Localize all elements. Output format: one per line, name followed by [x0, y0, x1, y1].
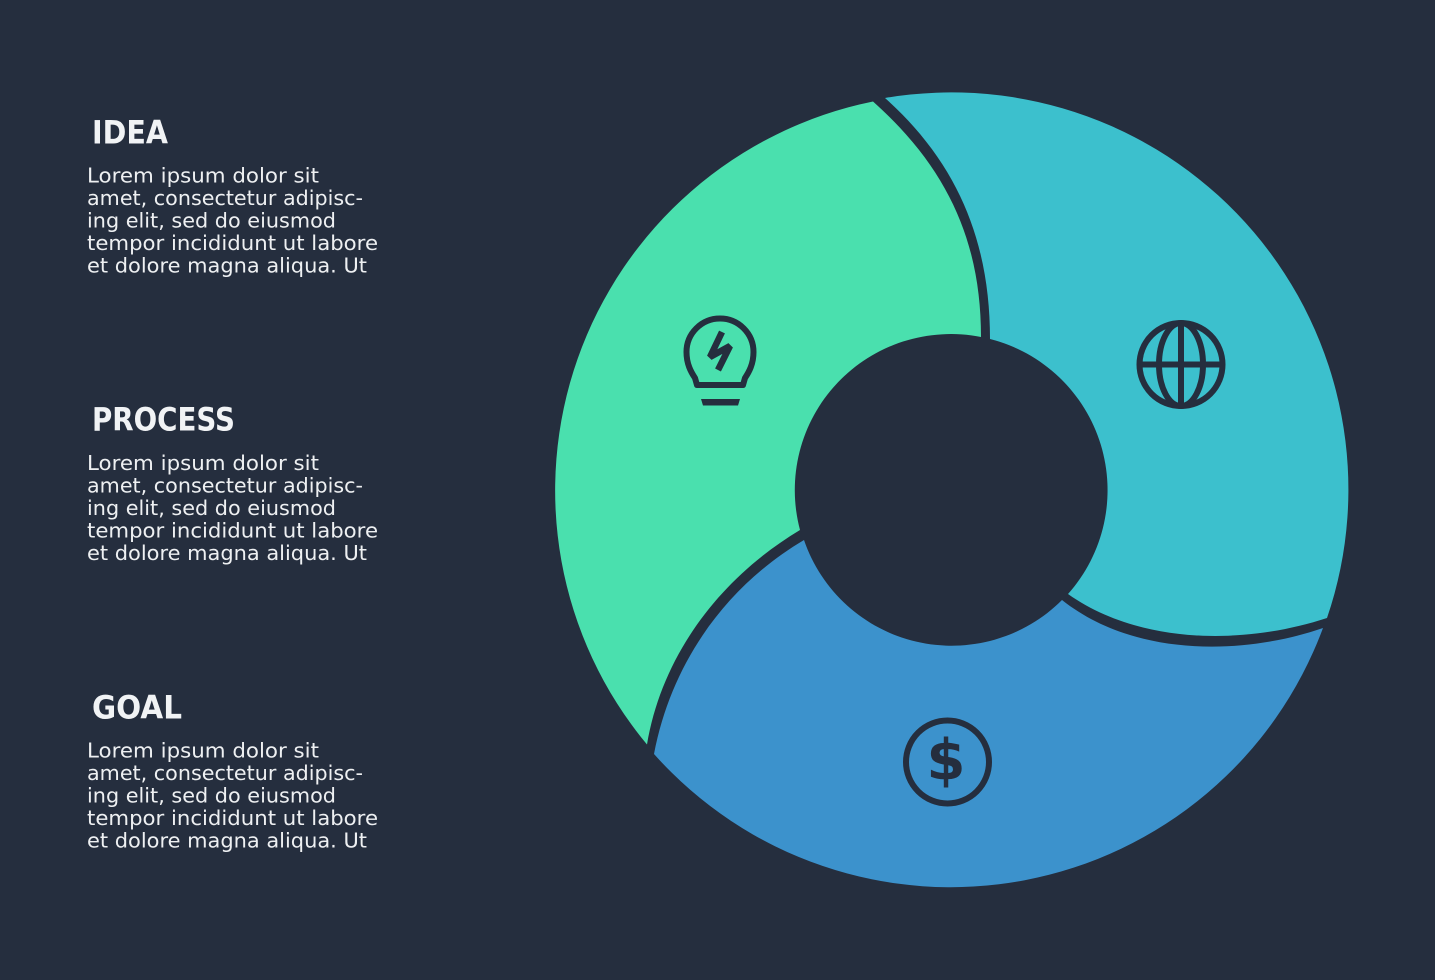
body text: idea: ing elit, sed do eiusmod	[87, 208, 336, 232]
body text: process: Lorem ipsum dolor sit	[87, 451, 319, 475]
body text: process: tempor incididunt ut labore	[87, 518, 378, 542]
body text: process	[87, 451, 378, 565]
text block: goal	[87, 688, 378, 852]
body text: process: amet, consectetur adipisc-	[87, 474, 363, 498]
body text: process: ing elit, sed do eiusmod	[87, 496, 336, 520]
body text: goal: tempor incididunt ut labore	[87, 806, 378, 830]
icon: dollar coin	[906, 720, 989, 804]
icon: light bulb	[686, 318, 754, 406]
body text: goal: Lorem ipsum dolor sit	[87, 738, 319, 762]
segment: green	[555, 102, 981, 744]
body text: idea: tempor incididunt ut labore	[87, 231, 378, 255]
icon: globe	[1140, 323, 1222, 406]
text block: process	[87, 400, 378, 565]
heading: process: PROCESS	[92, 400, 235, 438]
dollar sign: $	[927, 728, 965, 793]
body text: idea: et dolore magna aliqua. Ut	[87, 254, 367, 278]
heading: goal: GOAL	[92, 688, 182, 726]
body text: process: et dolore magna aliqua. Ut	[87, 541, 367, 565]
body text: goal: et dolore magna aliqua. Ut	[87, 828, 367, 852]
segment: blue	[654, 540, 1323, 887]
body text: idea	[87, 164, 378, 278]
segment: teal	[885, 92, 1348, 636]
body text: idea: Lorem ipsum dolor sit	[87, 164, 319, 188]
body text: idea: amet, consectetur adipisc-	[87, 186, 363, 210]
body text: goal: ing elit, sed do eiusmod	[87, 784, 336, 808]
body text: goal	[87, 738, 378, 852]
heading: idea: IDEA	[92, 114, 168, 152]
body text: goal: amet, consectetur adipisc-	[87, 761, 363, 785]
text block: idea	[87, 114, 378, 278]
